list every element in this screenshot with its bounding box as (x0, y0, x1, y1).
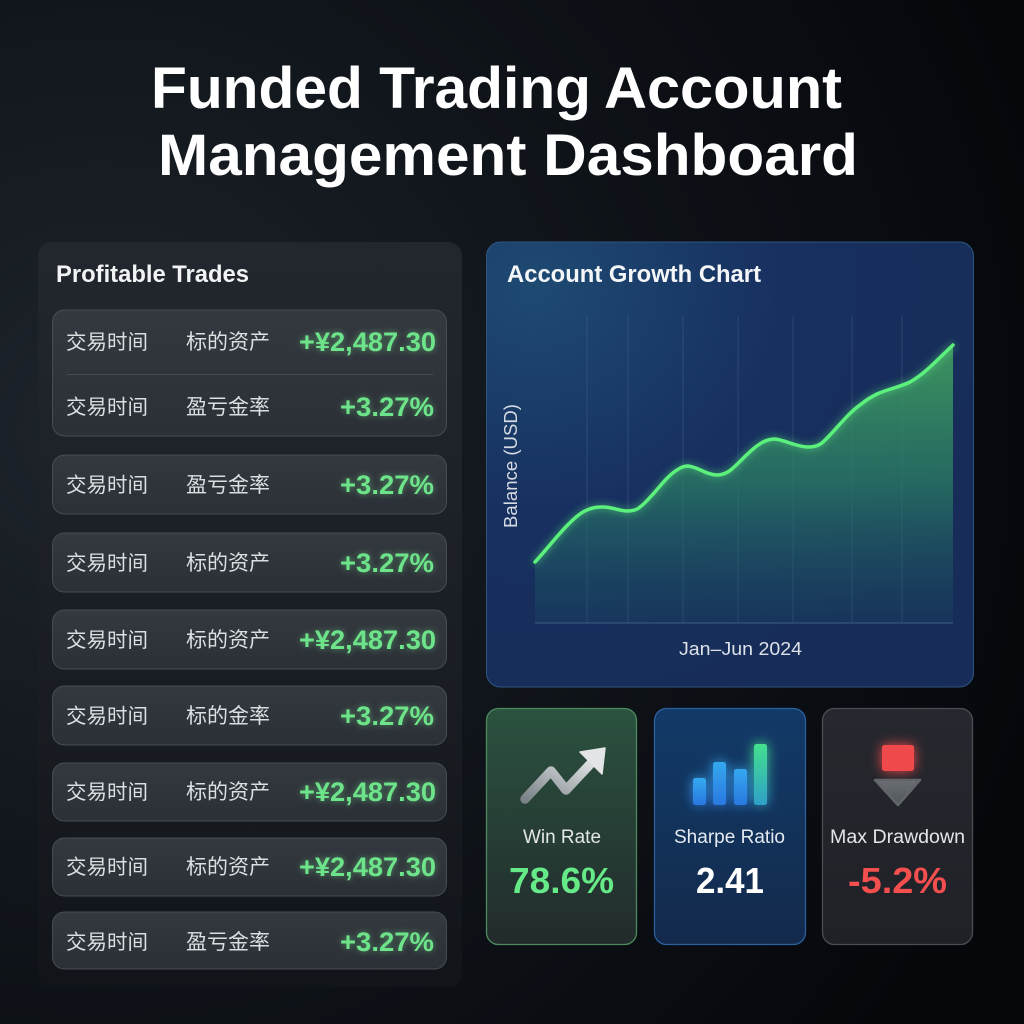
axis line (535, 622, 953, 624)
trade row 8 (52, 912, 446, 969)
trade row 6: 标的资产 (186, 781, 270, 804)
trade row 7: 标的资产 (186, 856, 270, 879)
trade row 8: 交易时间 (66, 931, 148, 954)
icon: rising arrow (525, 748, 605, 799)
trade row 1: 标的资产 (186, 331, 270, 354)
trade row 6: 交易时间 (66, 781, 148, 804)
growth line (535, 345, 953, 562)
trade row 2 (52, 455, 446, 514)
trade row 5: 标的金率 (186, 705, 270, 728)
trade row 3: +3.27% (340, 548, 434, 578)
trade row 5 (52, 686, 446, 745)
trade row 5: 交易时间 (66, 705, 148, 728)
trade row 4: 标的资产 (186, 629, 270, 652)
trade row 4 (52, 610, 446, 669)
chart heading: Account Growth Chart (507, 261, 761, 288)
panel heading: Profitable Trades (56, 261, 249, 288)
trade row 5: +3.27% (340, 701, 434, 731)
trade row 6: +¥2,487.30 (299, 777, 436, 807)
trade row 6 (52, 763, 446, 821)
trade row 8: 盈亏金率 (186, 931, 270, 954)
label: Max Drawdown (830, 827, 965, 848)
title: Funded Trading (151, 56, 591, 121)
y axis label: Balance (USD) (500, 404, 521, 528)
trade row 1: 交易时间 (66, 331, 148, 354)
trade row 2: 盈亏金率 (186, 474, 270, 497)
label: Sharpe Ratio (674, 827, 785, 848)
trade row 4: +¥2,487.30 (299, 625, 436, 655)
trade row 1: 盈亏金率 (186, 396, 270, 419)
area under curve (535, 345, 953, 623)
trade row 4: 交易时间 (66, 629, 148, 652)
stat card: sharpe ratio (654, 708, 806, 944)
stat card: win rate (486, 708, 636, 944)
title: Management Dashboard (158, 123, 858, 188)
stat card: max drawdown (822, 708, 972, 944)
chart gridlines (587, 316, 902, 623)
label: Win Rate (523, 827, 601, 848)
title: Account (604, 56, 842, 121)
value: 2.41 (696, 860, 764, 901)
trade row 8: +3.27% (340, 927, 434, 957)
trade row 3: 标的资产 (186, 552, 270, 575)
trade row 3 (52, 533, 446, 592)
panel: profitable trades (38, 242, 462, 987)
trade row 2: 交易时间 (66, 474, 148, 497)
panel: account growth chart (486, 242, 974, 687)
trade row 3: 交易时间 (66, 552, 148, 575)
value: -5.2% (848, 860, 947, 901)
trade row 7 (52, 838, 446, 896)
trade row 1: +¥2,487.30 (299, 327, 436, 357)
trade row 1: +3.27% (340, 392, 434, 422)
trade row 7: 交易时间 (66, 856, 148, 879)
trade row 2: +3.27% (340, 470, 434, 500)
icon: bar chart (693, 744, 767, 805)
icon: drawdown arrow (875, 745, 920, 805)
trade row 1: 交易时间 (66, 396, 148, 419)
trade row 7: +¥2,487.30 (299, 852, 436, 882)
trade row 1 (52, 310, 446, 436)
title (151, 56, 858, 188)
x axis label: Jan–Jun 2024 (679, 638, 802, 659)
value: 78.6% (509, 860, 614, 901)
